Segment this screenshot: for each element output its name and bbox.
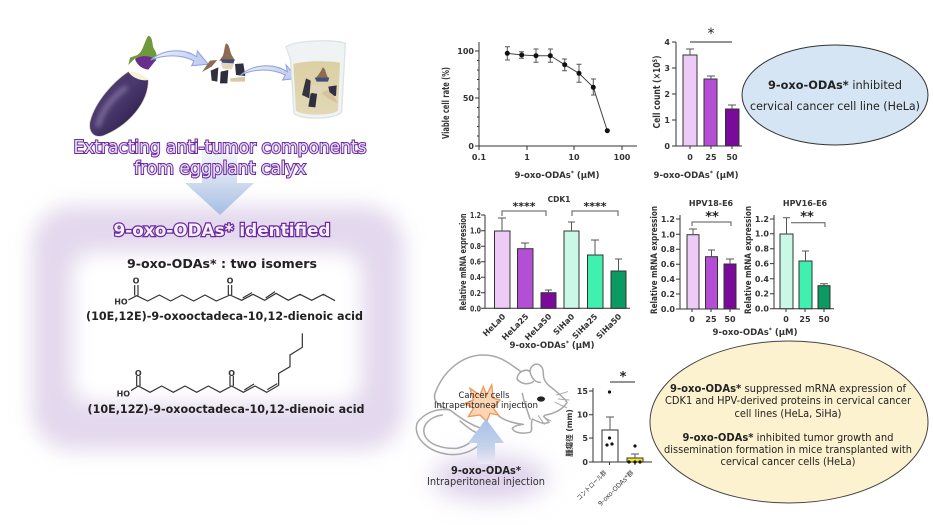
- callout: summary of results: CDK1 and HPV-derived proteins in cervical cancer: [665, 396, 912, 407]
- heading: two isomers: 9-oxo-ODAs* : two isomers: [127, 256, 317, 271]
- chart: viable cell rate: 50: [463, 94, 474, 103]
- chart: CDK1 expression: HeLa25: [500, 312, 531, 342]
- chart: CDK1 expression: 1.0: [470, 227, 481, 236]
- heading: 9-oxo-ODAs identified: 9-oxo-ODAs* identified: [114, 221, 330, 240]
- chart: HPV18-E6 expression: 1.0: [661, 230, 675, 239]
- chart: cell count: Cell count (×10: [652, 46, 663, 128]
- panel: mouse lilac glow: [432, 456, 548, 500]
- structure: 10E,12Z isomer: HO: [117, 390, 130, 399]
- callout: summary of results: [650, 341, 928, 503]
- chart: tumor diameter: [564, 370, 652, 508]
- chart: cell count: 50: [726, 153, 738, 162]
- chart: viable cell rate: Viable cell rate (%): [441, 67, 452, 139]
- label: treatment injection: [427, 465, 545, 488]
- chart: CDK1 expression: ****: [583, 200, 607, 213]
- chart: tumor diameter: 15: [577, 387, 588, 396]
- chart: cell count: 25: [705, 153, 717, 162]
- chart: viable cell rate: 10: [568, 153, 580, 162]
- chart: viable cell rate: *: [571, 170, 575, 177]
- structure: 10E,12Z isomer: [117, 333, 302, 399]
- heading: extracting anti-tumor components: Extracting anti-tumor components: [74, 138, 366, 158]
- chart: CDK1 expression: HeLa0: [481, 312, 508, 338]
- chart: viable cell rate: [441, 42, 637, 181]
- chart: HPV16-E6 expression: HPV16-E6: [783, 199, 828, 208]
- structure: 10E,12E isomer: O: [133, 276, 140, 285]
- heading: extracting anti-tumor components: [74, 138, 366, 179]
- chart: HPV18-E6 expression: [650, 199, 740, 324]
- chart: tumor diameter: 9-oxo-ODAs*群: [596, 468, 636, 508]
- chart: cell count: 9-oxo-ODAs: [654, 171, 713, 181]
- chart: CDK1 expression: 9-oxo-ODAs: [510, 341, 569, 351]
- label: cancer cells injection: Intraperitoneal injection: [434, 401, 538, 411]
- callout: HeLa inhibition: 9-oxo-ODAs* inhibited: [768, 78, 902, 92]
- illustration: mouse: [416, 355, 569, 455]
- chart: HPV16-E6 expression: 50: [818, 315, 830, 324]
- arrow: dried calyx to beaker: [241, 65, 298, 80]
- structure: 10E,12Z isomer: O: [228, 369, 235, 378]
- chart: viable cell rate: 100: [614, 153, 631, 162]
- chart: cell count: (μM): [713, 171, 738, 181]
- icon: beaker with extract: [286, 41, 345, 118]
- chart: HPV16-E6 expression: 25: [799, 315, 811, 324]
- chart: viable cell rate: 100: [457, 47, 474, 56]
- chart: HPV16-E6 expression: 0.6: [755, 260, 769, 269]
- icon: eggplant calyx: [128, 36, 157, 70]
- icon: eggplant: [90, 71, 148, 136]
- callout: summary of results: 9-oxo-ODAs* suppressed mRNA expression of: [670, 384, 906, 395]
- callout: summary of results: cell lines (HeLa, SiHa): [734, 409, 842, 420]
- chart: CDK1 expression: 0.0: [470, 304, 481, 313]
- chart: CDK1 expression: 1.2: [470, 211, 481, 220]
- chart: HPV16-E6 expression: 1.0: [755, 230, 769, 239]
- chart: HPV18-E6 expression: 0.2: [661, 290, 675, 299]
- chart: cell count: *: [710, 170, 714, 177]
- chart: HPV18-E6 expression: 25: [705, 315, 717, 324]
- icon: down arrow: [185, 140, 254, 215]
- chart: cell count: 3: [664, 64, 670, 73]
- chart: CDK1 expression: *: [566, 340, 570, 347]
- chart: CDK1 expression: ****: [512, 200, 536, 213]
- label: shared HPV x-axis title: 9-oxo-ODAs: [712, 328, 772, 338]
- chart: tumor diameter: 5: [582, 434, 588, 443]
- chart: cell count: 1: [664, 116, 670, 125]
- chart: HPV16-E6 expression: 0.4: [755, 275, 769, 284]
- label: 10E,12E name: (10E,12E)-9-oxooctadeca-10,12-dienoic acid: [86, 309, 363, 323]
- chart: tumor diameter: *: [620, 370, 627, 385]
- chart: CDK1 expression: 0.8: [470, 242, 481, 251]
- label: treatment injection: 9-oxo-ODAs*: [451, 465, 521, 477]
- chart: HPV18-E6 expression: 1.2: [661, 215, 675, 224]
- panel: purple glow background: [32, 206, 404, 450]
- chart: CDK1 expression: 0.6: [470, 258, 481, 267]
- chart: cell count: 4: [664, 38, 670, 47]
- chart: HPV16-E6 expression: 0: [783, 315, 789, 324]
- chart: cell count: 0: [664, 142, 670, 151]
- chart: HPV18-E6 expression: Relative mRNA expression: [650, 206, 660, 314]
- callout: HeLa inhibition: cervical cancer cell line (HeLa): [750, 99, 920, 113]
- chart: HPV16-E6 expression: Relative mRNA expression: [744, 206, 754, 314]
- chart: HPV18-E6 expression: 0.8: [661, 245, 675, 254]
- label: shared HPV x-axis title: *: [769, 327, 773, 334]
- label: cancer cells injection: Cancer cells: [458, 391, 510, 401]
- chart: viable cell rate: 1: [524, 153, 530, 162]
- label: treatment injection: Intraperitoneal injection: [427, 476, 545, 488]
- chart: HPV16-E6 expression: 0.2: [755, 290, 769, 299]
- callout: summary of results: 9-oxo-ODAs* inhibited tumor growth and: [682, 433, 894, 444]
- structure: 10E,12E isomer: O: [227, 276, 234, 285]
- label: cancer cells injection: [434, 391, 538, 411]
- chart: CDK1 expression: [459, 195, 630, 351]
- chart: cell count: [652, 26, 742, 181]
- chart: cell count: ): [652, 56, 663, 59]
- chart: HPV16-E6 expression: [744, 199, 834, 324]
- callout: summary of results: dissemination formation in mice transplanted with: [664, 445, 912, 456]
- callout: HeLa inhibition: [742, 45, 928, 145]
- chart: CDK1 expression: CDK1: [548, 195, 570, 204]
- chart: tumor diameter: 腫瘍径 (mm): [564, 409, 574, 457]
- heading: extracting anti-tumor components: from eggplant calyx: [134, 159, 306, 179]
- chart: HPV18-E6 expression: **: [705, 210, 719, 225]
- chart: cell count: 2: [664, 90, 670, 99]
- chart: viable cell rate: 9-oxo-ODAs: [514, 171, 574, 181]
- chart: cell count: 5: [652, 59, 659, 62]
- chart: cell count: *: [708, 26, 714, 42]
- chart: HPV16-E6 expression: 0.8: [755, 245, 769, 254]
- chart: viable cell rate: 0.1: [472, 153, 487, 162]
- chart: viable cell rate: (μM): [574, 171, 600, 181]
- label: shared HPV x-axis title: (μM): [772, 328, 798, 338]
- chart: HPV16-E6 expression: 0.0: [755, 305, 769, 314]
- chart: HPV16-E6 expression: 1.2: [755, 215, 769, 224]
- illustration: dried calyx and beaker: [202, 41, 345, 118]
- chart: HPV18-E6 expression: 50: [724, 315, 736, 324]
- chart: CDK1 expression: Relative mRNA expression: [459, 214, 469, 310]
- chart: CDK1 expression: SiHa0: [552, 312, 577, 337]
- chart: HPV18-E6 expression: 0.6: [661, 260, 675, 269]
- chart: HPV18-E6 expression: 0.4: [661, 275, 675, 284]
- chart: CDK1 expression: SiHa50: [595, 312, 624, 341]
- chart: tumor diameter: コントロール群: [574, 468, 609, 502]
- label: 10E,12Z name: (10E,12Z)-9-oxooctadeca-10,12-dienoic acid: [88, 402, 364, 416]
- chart: HPV18-E6 expression: 0.0: [661, 305, 675, 314]
- chart: cell count: 0: [687, 153, 693, 162]
- icon: up arrow: [468, 419, 504, 464]
- chart: CDK1 expression: (μM): [569, 341, 594, 351]
- chart: CDK1 expression: 0.4: [470, 273, 481, 282]
- chart: CDK1 expression: 0.2: [470, 289, 481, 298]
- chart: HPV18-E6 expression: HPV18-E6: [689, 199, 734, 208]
- structure: 10E,12E isomer: [114, 276, 335, 307]
- icon: tumor burst: [465, 385, 500, 422]
- illustration: eggplant and calyx: [90, 36, 208, 136]
- structure: 10E,12E isomer: HO: [114, 298, 128, 307]
- chart: CDK1 expression: SiHa25: [571, 312, 600, 341]
- chart: HPV16-E6 expression: **: [800, 210, 814, 225]
- structure: 10E,12Z isomer: O: [135, 369, 142, 378]
- chart: tumor diameter: 10: [577, 411, 588, 420]
- icon: dried calyx: [202, 43, 245, 83]
- chart: CDK1 expression: HeLa50: [523, 312, 554, 342]
- callout: summary of results: cervical cancer cells (HeLa): [720, 457, 856, 468]
- chart: tumor diameter: 0: [582, 458, 588, 467]
- chart: HPV18-E6 expression: 0: [689, 315, 695, 324]
- chart: viable cell rate: 0: [468, 142, 474, 151]
- arrow: calyx to dried calyx: [151, 51, 208, 66]
